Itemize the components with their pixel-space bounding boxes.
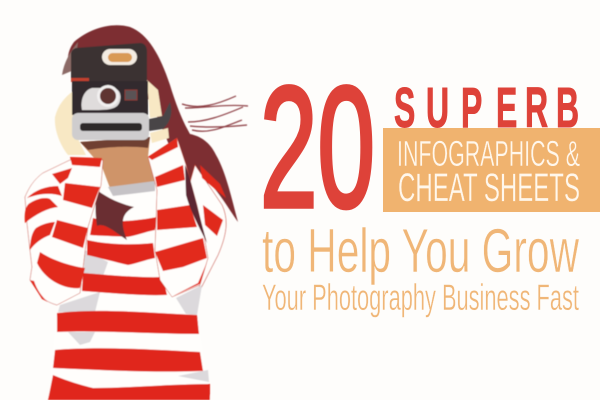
number 20: 20 bbox=[260, 52, 375, 244]
word SUPERB: P bbox=[461, 75, 482, 139]
lower right hand bbox=[150, 128, 169, 143]
illustration: girl with instant camera bbox=[25, 25, 248, 400]
word SUPERB bbox=[394, 75, 579, 139]
neck bbox=[80, 137, 155, 188]
left sleeve red stripes bbox=[25, 157, 102, 302]
hair strand over chest bbox=[96, 190, 134, 240]
lens bbox=[97, 85, 119, 107]
word SUPERB: U bbox=[426, 75, 449, 139]
right sleeve red stripes bbox=[148, 138, 207, 296]
camera middle body bbox=[72, 81, 148, 115]
sweater collar bbox=[108, 181, 155, 196]
neck shadow bbox=[80, 137, 150, 150]
viewfinder bbox=[102, 49, 137, 65]
red stripe bbox=[71, 78, 89, 82]
viewfinder glass bbox=[108, 53, 132, 62]
back right sleeve red stripes bbox=[200, 165, 226, 236]
left hand bbox=[55, 92, 86, 155]
camera top housing bbox=[71, 43, 147, 82]
left sleeve bbox=[25, 160, 103, 305]
torso shading bbox=[58, 250, 209, 382]
lens plate bbox=[81, 88, 121, 110]
word SUPERB: B bbox=[556, 75, 579, 139]
flash window bbox=[125, 90, 137, 100]
word SUPERB: R bbox=[525, 75, 548, 139]
right sleeve bbox=[148, 138, 208, 297]
hair behind the body bbox=[62, 25, 238, 245]
hair strand over right sleeve bbox=[185, 165, 207, 243]
hair wisps blowing right bbox=[182, 96, 248, 131]
right hand bbox=[147, 80, 162, 118]
film slot bbox=[80, 123, 142, 131]
orange banner bbox=[383, 128, 600, 212]
camera strap bbox=[149, 102, 171, 131]
word SUPERB: S bbox=[394, 75, 415, 139]
lens glass bbox=[100, 88, 116, 104]
word SUPERB: E bbox=[496, 75, 517, 139]
camera bottom body bbox=[72, 113, 149, 140]
torso red stripes bbox=[48, 217, 210, 400]
back right sleeve bbox=[185, 165, 226, 290]
torso bbox=[48, 185, 211, 400]
instant camera bbox=[71, 43, 149, 140]
